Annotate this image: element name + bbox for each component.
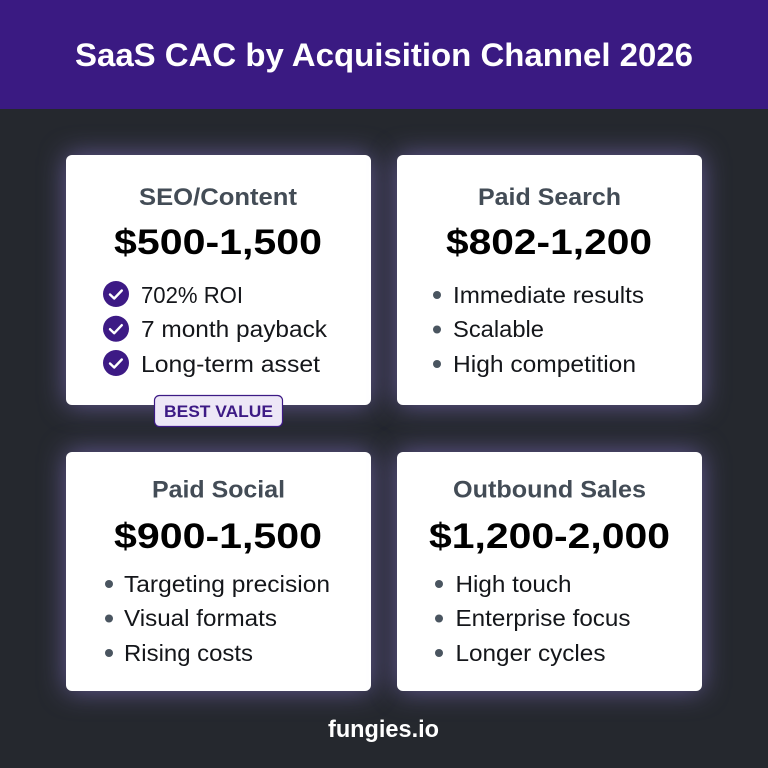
badge: best value: BEST VALUE [164,402,273,421]
price: Outbound Sales: $1,200-2,000 [429,517,670,556]
heading: Outbound Sales: Outbound Sales [453,476,646,504]
list: Outbound Sales: High touch [456,571,572,597]
badge: best value [154,396,282,426]
icon: check 3 [103,350,129,376]
icon: check 2 [103,316,129,342]
list: Outbound Sales [435,571,630,666]
list: Paid Search: High competition [453,351,636,377]
footer brand: fungies.io [328,716,439,743]
header band [0,0,768,109]
panel: Outbound Sales [397,452,702,691]
title: SaaS CAC by Acquisition Channel 2026 [75,37,693,73]
heading: Paid Social: Paid Social [152,476,285,504]
list item: Long-term asset: Long-term asset [141,351,321,377]
icon: check 1 [103,281,129,307]
heading: Paid Search: Paid Search [478,184,621,211]
list: Outbound Sales: Longer cycles [456,640,606,666]
price: Paid Search: $802-1,200 [446,223,652,262]
price: SEO/Content: $500-1,500 [114,223,322,262]
panel: Paid Search [397,155,702,405]
list: Paid Social [105,571,330,666]
panel: Paid Social [66,452,371,691]
list: Paid Search: Scalable [453,316,544,342]
list: Paid Social: Targeting precision [124,571,330,597]
list item: 702% ROI: 702% ROI [141,282,243,308]
price: Paid Social: $900-1,500 [114,517,322,556]
heading: SEO/Content: SEO/Content [139,184,297,211]
panel: SEO/Content [66,155,371,426]
list: Paid Search: Immediate results [453,282,644,308]
list: Paid Social: Rising costs [124,640,253,666]
list item: 7 month payback: 7 month payback [141,316,328,342]
list: Paid Search [433,282,644,377]
list: Paid Social: Visual formats [124,605,277,631]
list: Outbound Sales: Enterprise focus [456,605,630,631]
